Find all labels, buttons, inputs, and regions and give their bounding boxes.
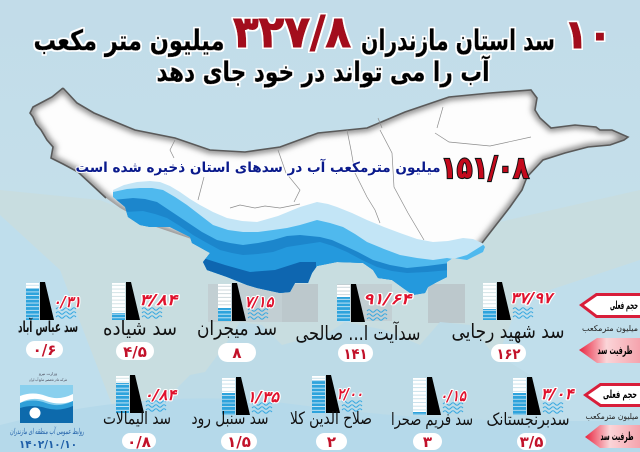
dam: Salah al-Din Kola: ۲ bbox=[327, 433, 336, 451]
dam: Sonbol Rud: ۱/۳۵ bbox=[247, 388, 280, 406]
dam: Berenjestanak bbox=[486, 377, 576, 451]
title: ۰ bbox=[588, 12, 612, 58]
organisation logo and date: شرکت مادر تخصصی منابع آب ایران bbox=[29, 377, 67, 382]
dam: Salah al-Din Kola: صلاح الدین کلا bbox=[290, 409, 372, 429]
dam: Sonbol Rud: ۱/۵ bbox=[227, 433, 251, 451]
legend lower bbox=[583, 383, 640, 448]
organisation logo and date: وزارت نیرو bbox=[38, 371, 57, 376]
title: ۳۲۷/۸ bbox=[233, 7, 351, 58]
dam: Shahid Rajaei bbox=[452, 282, 564, 363]
dam: Alimalat bbox=[103, 375, 178, 451]
organisation logo and date: روابط عمومی آب منطقه ای مازندران bbox=[10, 426, 84, 436]
title: میلیون متر مکعب bbox=[34, 24, 224, 57]
map of Mazandaran province bbox=[30, 88, 628, 262]
legend upper bbox=[579, 293, 640, 363]
dam: Sonbol Rud bbox=[192, 377, 280, 451]
dam: Shahid Rajaei: سد شهید رجایی bbox=[452, 319, 564, 343]
dam: Shiadeh: ۴/۵ bbox=[123, 343, 147, 361]
dam: Abbas Abad: ۰/۳۱ bbox=[53, 293, 81, 311]
dam: Mijran bbox=[197, 283, 277, 362]
dam: Mijran: ۸ bbox=[232, 344, 242, 362]
dam: Alimalat: ۰/۸ bbox=[127, 433, 151, 451]
legend upper: میلیون مترمکعب bbox=[582, 324, 638, 333]
dam: Abbas Abad: سد عباس آباد bbox=[18, 318, 78, 336]
dam: Ayatollah Salehi: ۱۴۱ bbox=[344, 345, 368, 363]
dam: Berenjestanak: سدبرنجستانک bbox=[486, 410, 570, 430]
dam: Berenjestanak: ۳/۰۴ bbox=[540, 385, 576, 403]
legend lower: میلیون مترمکعب bbox=[586, 412, 638, 421]
dam: Shiadeh: ۳/۸۴ bbox=[139, 291, 179, 309]
dam: Alimalat: ۰/۸۴ bbox=[144, 386, 178, 404]
dam: Shiadeh: سد شیاده bbox=[103, 316, 177, 340]
dam: Ayatollah Salehi: سدآیت ا... صالحی bbox=[296, 320, 420, 345]
dam: Abbas Abad: ۰/۶ bbox=[33, 341, 56, 359]
logo mark bbox=[20, 385, 73, 423]
dam: Abbas Abad bbox=[18, 282, 81, 359]
dam: Mijran: سد میجران bbox=[197, 316, 277, 340]
dam: Ayatollah Salehi bbox=[296, 284, 420, 363]
stored water callout: میلیون مترمکعب آب در سدهای استان ذخیره شده است bbox=[76, 158, 440, 176]
dam: Farim Sahra: ۳ bbox=[423, 433, 432, 451]
dam: Salah al-Din Kola bbox=[290, 375, 372, 451]
dam: Ayatollah Salehi: ۹۱/۶۴ bbox=[363, 290, 413, 308]
organisation logo and date bbox=[10, 371, 84, 451]
dam: Shiadeh bbox=[103, 282, 179, 361]
dam: Farim Sahra: ۰/۱۵ bbox=[440, 387, 467, 405]
stored water callout bbox=[76, 151, 529, 186]
dam: Farim Sahra: سد فریم صحرا bbox=[391, 410, 473, 430]
dam: Alimalat: سد الیمالات bbox=[103, 409, 171, 429]
dam: Farim Sahra bbox=[391, 377, 473, 451]
dam: Berenjestanak: ۳/۵ bbox=[520, 433, 543, 451]
stored water callout: ۱۵۱/۰۸ bbox=[441, 151, 529, 186]
title: ۱ bbox=[564, 12, 588, 58]
dam: Mijran: ۷/۱۵ bbox=[244, 293, 274, 311]
water level waves bbox=[113, 181, 485, 295]
dam: Shahid Rajaei: ۳۷/۹۷ bbox=[510, 289, 555, 307]
title bbox=[34, 7, 612, 88]
title: آب را می تواند در خود جای دهد bbox=[156, 55, 490, 88]
organisation logo and date: ۱۴۰۲/۱۰/۱۰ bbox=[19, 438, 77, 451]
dam: Salah al-Din Kola: ۲/۰۰ bbox=[337, 385, 363, 403]
dam: Shahid Rajaei: ۱۶۲ bbox=[496, 345, 520, 363]
title: سد استان مازندران bbox=[361, 24, 555, 57]
dam: Sonbol Rud: سد سنبل رود bbox=[192, 409, 268, 429]
